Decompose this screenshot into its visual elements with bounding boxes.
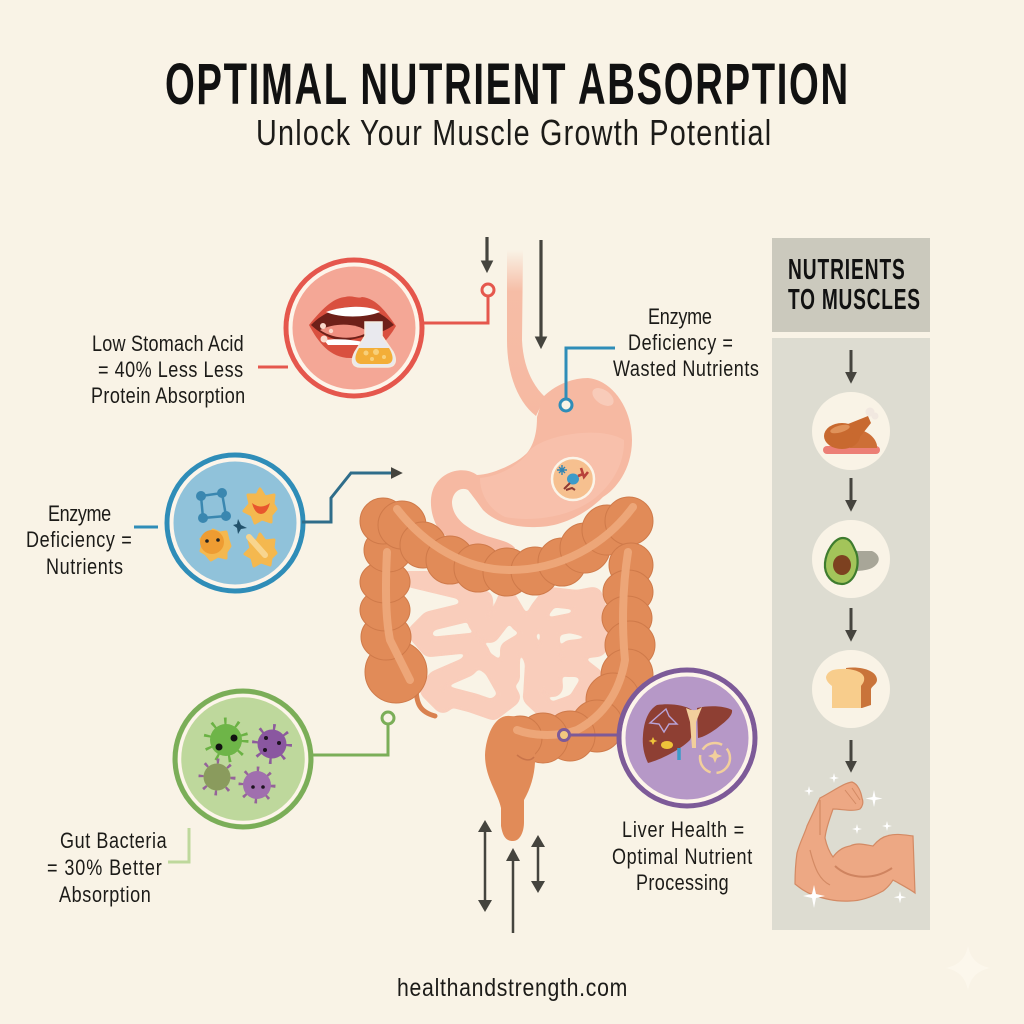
icon: recycle circle <box>700 743 730 773</box>
icon: purple bacteria <box>201 727 289 801</box>
subtitle: Unlock Your Muscle Growth Potential <box>256 112 771 153</box>
label: enzyme deficiency nutrients: Enzyme <box>48 502 111 526</box>
colon inner stripes <box>386 507 633 735</box>
large intestine <box>360 497 655 841</box>
top arrows <box>487 237 541 344</box>
label: wasted nutrients: Enzyme <box>648 305 712 329</box>
label: gut bacteria <box>47 829 167 907</box>
appendix <box>416 686 435 716</box>
label: wasted nutrients: Deficiency = <box>628 331 733 355</box>
icon: sparkles <box>803 773 906 908</box>
label: low stomach acid: Low Stomach Acid <box>92 332 244 356</box>
panel header: TO MUSCLES <box>788 284 920 316</box>
label: low stomach acid: = 40% Less Less <box>98 358 243 382</box>
label: gut bacteria: Gut Bacteria <box>60 829 167 853</box>
callout: enzyme deficiency connector <box>560 348 615 411</box>
small intestine <box>413 578 600 713</box>
bottom arrows <box>478 820 545 933</box>
icon: flask <box>353 322 395 367</box>
label: gut bacteria: = 30% Better <box>47 856 162 880</box>
icon: enzyme faces <box>200 489 276 566</box>
panel: nutrients to muscles <box>772 238 930 930</box>
label: wasted nutrients: Wasted Nutrients <box>613 357 759 381</box>
label: liver health: Optimal Nutrient <box>612 845 753 869</box>
label: liver health: Liver Health = <box>622 818 744 842</box>
icon: liver <box>643 704 732 763</box>
icon: chicken <box>812 392 890 470</box>
icon: mouth <box>309 296 396 358</box>
title: OPTIMAL NUTRIENT ABSORPTION <box>165 53 848 117</box>
label: low stomach acid: Protein Absorption <box>91 384 245 408</box>
panel header <box>772 238 930 332</box>
label: enzyme deficiency nutrients: Deficiency = <box>26 528 132 552</box>
connector: green circle <box>168 712 394 862</box>
label: enzyme deficiency nutrients <box>26 502 132 579</box>
label: wasted nutrients <box>613 305 759 381</box>
source footer: healthandstrength.com <box>397 973 627 1001</box>
connector: red to tract <box>258 284 494 367</box>
panel arrows <box>850 350 852 768</box>
callout: gut bacteria circle <box>175 691 311 827</box>
connector: liver <box>558 730 620 740</box>
icon: flexed arm <box>795 782 915 901</box>
icon: molecule square <box>196 488 231 523</box>
icon: stomach enzyme badge <box>552 458 594 500</box>
panel header: NUTRIENTS <box>788 254 905 286</box>
icon: avocado and seed <box>812 520 890 598</box>
rectum <box>485 716 535 841</box>
watermark star <box>946 946 990 990</box>
callout: stomach acid circle <box>286 260 422 396</box>
icon: green bacteria <box>207 721 245 759</box>
label: liver health <box>612 818 753 895</box>
icon: bread <box>812 650 890 728</box>
haustra bumps <box>360 497 655 763</box>
callout: liver circle <box>619 670 755 806</box>
connector: blue circle arrow <box>134 473 398 527</box>
label: low stomach acid <box>91 332 245 408</box>
callout: enzyme circle <box>167 455 303 591</box>
digestive tract: esophagus and stomach <box>431 250 632 556</box>
label: enzyme deficiency nutrients: Nutrients <box>46 555 123 579</box>
label: liver health: Processing <box>636 871 729 895</box>
label: gut bacteria: Absorption <box>59 883 151 907</box>
